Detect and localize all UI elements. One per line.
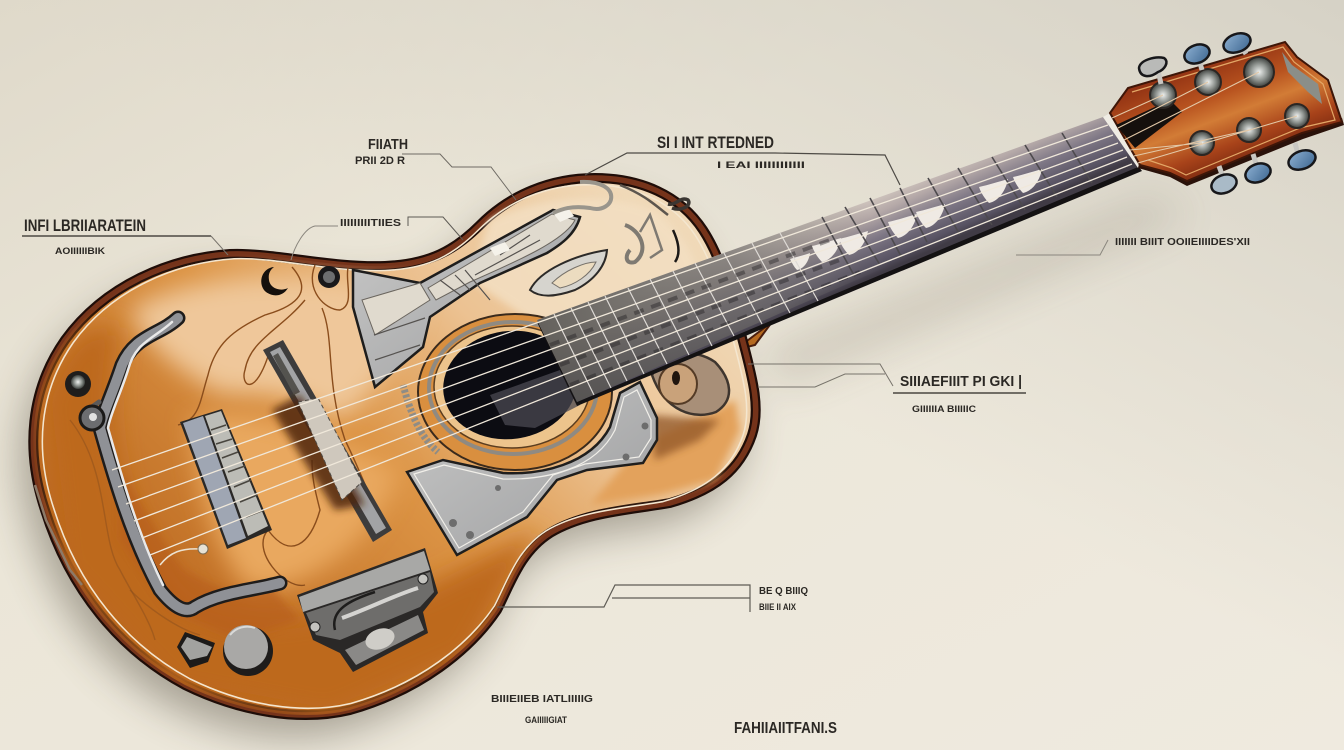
label: mid right callout xyxy=(748,364,1026,414)
label: lower callout: BE Q BIIIQ xyxy=(759,586,808,597)
f-hole crescent xyxy=(261,267,288,295)
headstock strings xyxy=(1112,72,1297,163)
frets xyxy=(554,233,818,395)
label: bottom callout: BIIIEIIEB IATLIIIIIG xyxy=(491,694,593,705)
tuning pegs xyxy=(1139,30,1318,197)
lattice strap beside the rosette xyxy=(403,385,438,452)
small ball end xyxy=(160,549,200,565)
label: mid right callout: GIIIIIIA BIIIIIC xyxy=(912,404,977,414)
label: lower callout xyxy=(497,585,808,612)
label: inner left callout xyxy=(291,217,463,260)
label: mid right callout: SIIIAEFIIIT PI GKI | xyxy=(900,373,1022,390)
round volume knob xyxy=(223,625,273,676)
headstock xyxy=(1110,42,1344,186)
dark fret texture xyxy=(550,240,860,385)
label: left callout: AOIIIIIIBIK xyxy=(55,246,106,256)
tuning posts xyxy=(1150,57,1309,155)
guitar shadow xyxy=(21,195,1190,737)
headstock inlay xyxy=(1282,52,1322,104)
tremolo arm xyxy=(82,318,280,610)
corner peeking past the neck xyxy=(735,322,772,350)
main bridge block xyxy=(180,409,272,549)
inner binding line xyxy=(42,185,747,708)
label: right callout xyxy=(1016,237,1250,255)
round knob xyxy=(318,266,340,288)
strings xyxy=(112,125,1132,555)
nut xyxy=(1103,113,1143,168)
label: top centre callout: SI I INT RTEDNED xyxy=(657,133,774,152)
bottom latch plate xyxy=(297,548,438,672)
label: left callout: INFI LBRIIARATEIN xyxy=(24,216,146,235)
swirl detail xyxy=(652,353,729,415)
label: top left callout: FIIATH xyxy=(368,136,408,153)
label: top centre callout: I EAI IIIIIIIIIIII xyxy=(717,160,805,170)
label: bottom callout: GAIIIIIGIAT xyxy=(525,715,567,725)
top scrollwork xyxy=(553,182,689,263)
peg heads xyxy=(1139,30,1318,197)
label: bottom caption: FAHIIAIITFANI.S xyxy=(734,720,837,737)
upper frets xyxy=(822,133,1092,277)
sound hole xyxy=(436,322,584,448)
screw knob xyxy=(65,371,91,397)
wood colour areas xyxy=(40,199,740,720)
white tabs on plate xyxy=(490,208,574,256)
arm hinge xyxy=(80,406,104,430)
small silver dot xyxy=(198,544,208,554)
edge clip xyxy=(35,485,82,585)
fretboard xyxy=(537,113,1143,402)
label: inner left callout: IIIIIIIIITIIES xyxy=(340,218,401,229)
inlays xyxy=(790,169,1042,270)
wood contour lines xyxy=(70,265,385,640)
body xyxy=(33,178,772,720)
small clamp block xyxy=(177,632,215,668)
upper metal plate xyxy=(353,208,580,387)
black string bed xyxy=(1116,100,1182,148)
pickguard xyxy=(407,382,657,555)
label: right callout: IIIIIII BIIIT OOIIEIIIIDES'XII xyxy=(1115,237,1250,248)
textured saddle xyxy=(272,395,365,510)
leaf shaped metal trim xyxy=(530,250,607,296)
label: top left callout xyxy=(355,136,516,200)
label: lower callout: BIIE II AIX xyxy=(759,602,796,612)
label: bottom callout xyxy=(491,694,593,725)
label: top centre callout xyxy=(585,133,900,185)
label: left callout xyxy=(22,216,228,256)
long bridge bar xyxy=(263,340,392,542)
label: top left callout: PRII 2D R xyxy=(355,155,405,167)
sound hole rosette xyxy=(418,314,612,470)
peg stems xyxy=(1158,44,1299,180)
neck underside xyxy=(537,160,1142,406)
